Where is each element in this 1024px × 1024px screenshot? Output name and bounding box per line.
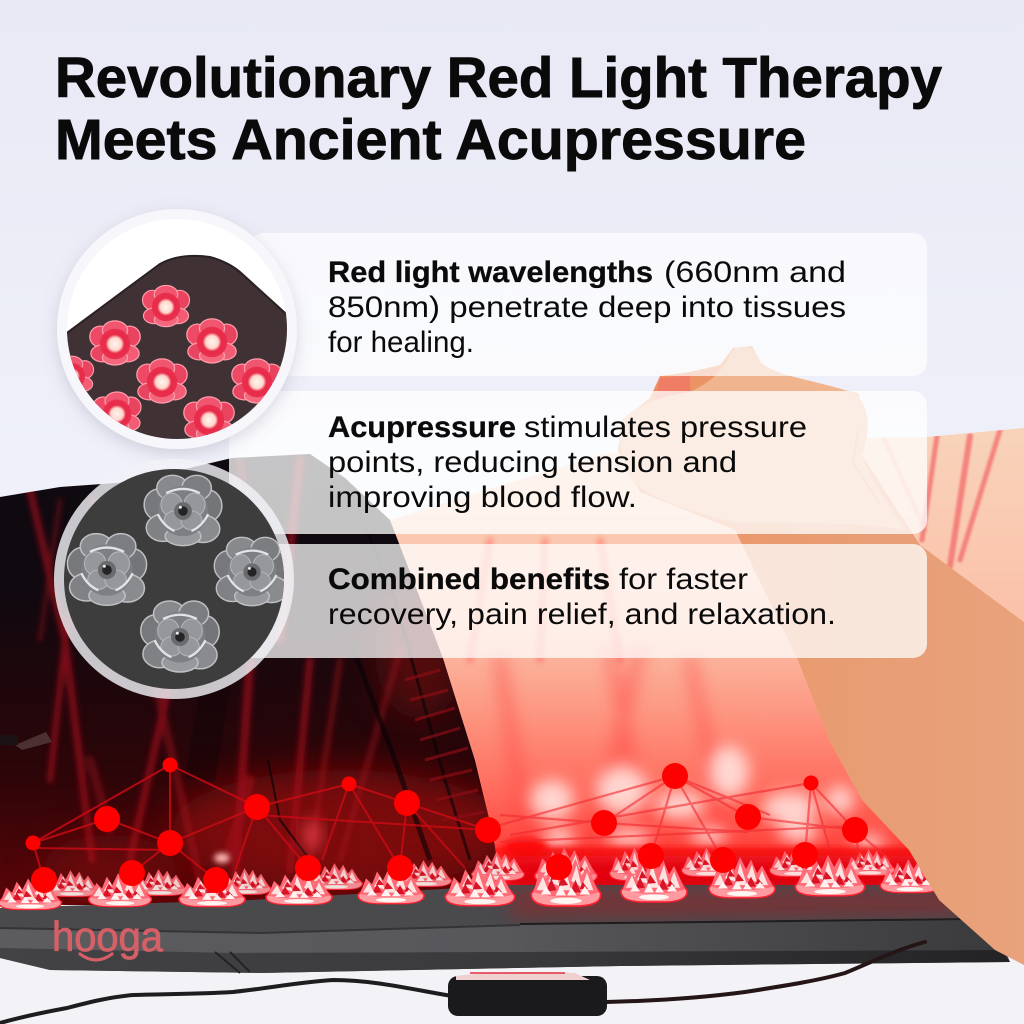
floor	[0, 955, 1024, 1024]
text: combined benefits	[328, 563, 836, 631]
text: combined benefits: recovery, pain relief, and relaxation.	[328, 598, 836, 631]
circle: acupressure roses close-up	[54, 459, 294, 699]
spiked acupressure roses, front row	[0, 855, 940, 910]
photo: person lying on mat	[0, 428, 1024, 905]
network lines	[33, 765, 488, 880]
text: combined benefits: Combined benefits	[328, 563, 610, 596]
panel: combined benefits	[229, 544, 927, 658]
text: acupressure: improving blood flow.	[328, 481, 637, 514]
mat	[0, 885, 1010, 973]
zipper pull	[0, 732, 52, 750]
text: red light wavelengths: Red light wavelengths	[328, 256, 653, 289]
cable controller	[448, 972, 607, 1016]
title	[55, 46, 942, 172]
clothing with red light beams	[0, 454, 500, 905]
title: Meets Ancient Acupressure	[55, 108, 806, 172]
text: acupressure: points, reducing tension and	[328, 446, 737, 479]
text: combined benefits: for faster	[619, 563, 748, 596]
network lines on skin	[500, 776, 890, 860]
text: red light wavelengths: for healing.	[328, 326, 474, 359]
red acupressure network	[26, 758, 890, 893]
arm and hand	[618, 346, 1024, 965]
mat corner	[67, 256, 287, 439]
glowing roses	[70, 284, 280, 438]
text: red light wavelengths: (660nm and	[664, 256, 846, 289]
clear roses	[67, 475, 290, 672]
text: acupressure	[328, 411, 807, 514]
text: acupressure: Acupressure	[328, 411, 516, 444]
cable	[0, 942, 925, 1023]
torso with glow	[380, 428, 1024, 908]
hooga logo: hooga	[52, 913, 164, 960]
panel: red light wavelengths	[250, 233, 927, 376]
circle: red glowing mat close-up	[50, 209, 297, 450]
text: red light wavelengths	[328, 256, 846, 359]
title: Revolutionary Red Light Therapy	[55, 46, 942, 110]
spiked acupressure roses, back row	[46, 847, 895, 897]
network nodes	[26, 758, 868, 893]
panel: acupressure	[229, 391, 927, 534]
text: red light wavelengths: 850nm) penetrate deep into tissues	[328, 291, 846, 324]
text: acupressure: stimulates pressure	[524, 411, 807, 444]
